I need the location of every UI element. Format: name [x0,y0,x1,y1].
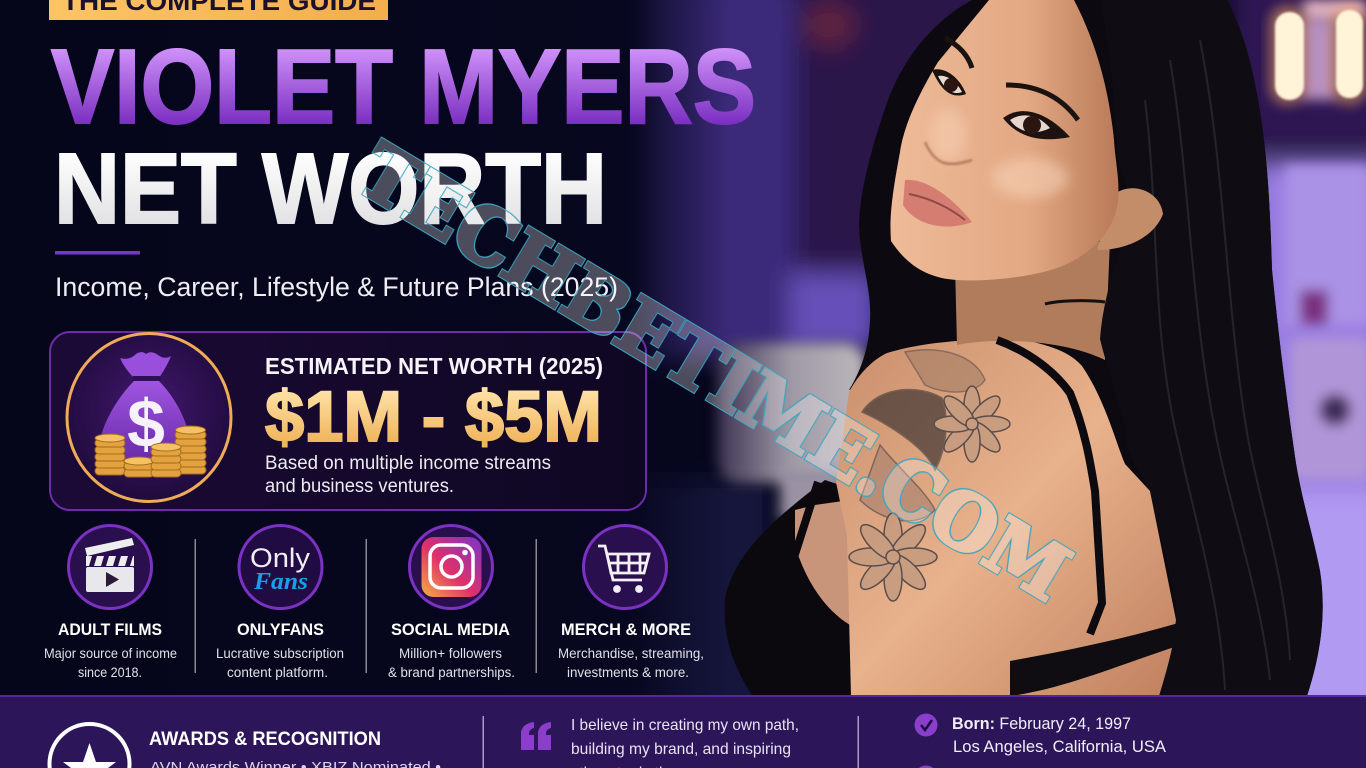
portrait illustration [725,0,1323,700]
ear [1097,188,1163,250]
quote text: I believe in creating my own path, [571,717,799,734]
straps [997,340,1102,634]
title: NET WORTH [54,133,607,245]
icon: coin stacks [95,426,206,477]
left dark fade [0,0,730,700]
income source: merch: investments & more. [567,665,689,680]
back hair [849,0,1323,696]
icon: shopping cart [598,546,649,592]
birth details: Los Angeles, California, USA [953,737,1167,756]
icon: onlyfans wordmark [250,543,311,595]
income source: onlyfans [216,526,344,680]
birth details: Born: February 24, 1997 [952,714,1131,733]
chest [795,500,850,625]
net worth note [265,453,551,497]
income source: merch: Merchandise, streaming, [558,646,704,661]
income source: merch: MERCH & MORE [561,620,691,639]
income source: social media: & brand partnerships. [388,665,515,680]
icon: onlyfans wordmark: Only [250,543,311,573]
hair highlights [1145,40,1290,690]
shoulder and back [836,339,1176,696]
shoulder tattoo [849,350,1010,601]
nose [925,142,972,164]
awards star badge [50,724,130,768]
income source: merch [558,526,704,680]
lips [903,180,972,227]
icon: money bag [67,334,231,502]
ceiling lights [1269,5,1366,105]
net worth value: $1M - $5M [265,378,602,457]
right front hair [1100,0,1323,696]
quote mark [521,722,551,750]
title [51,28,756,245]
income source: social media [388,526,515,680]
neck [955,240,1110,360]
awards text: AWARDS & RECOGNITION [149,729,381,750]
quote text: building my brand, and inspiring [571,741,791,758]
income source: onlyfans: Lucrative subscription [216,646,344,661]
garment [725,480,855,700]
income source: adult films: Major source of income [44,646,177,661]
icon: clapperboard [85,538,134,592]
income source: adult films: ADULT FILMS [58,620,162,639]
badge: the complete guide [49,0,388,20]
face [890,0,1118,280]
income source: adult films: since 2018. [78,665,142,680]
collar strap [1045,301,1105,304]
awards text [149,729,441,768]
net worth note: and business ventures. [265,476,454,497]
income source: onlyfans: content platform. [227,665,328,680]
subtitle: Income, Career, Lifestyle & Future Plans (2025) [55,272,618,302]
eyes and brows [932,38,1078,139]
income source: social media: SOCIAL MEDIA [391,620,510,639]
title: VIOLET MYERS [51,28,756,146]
quote text [571,717,799,768]
income source: adult films [44,526,177,680]
icon: instagram [422,537,482,597]
income source: social media: Million+ followers [399,646,502,661]
icon: onlyfans wordmark: Fans [253,569,308,595]
icon: money bag: $ [127,386,165,462]
income source: onlyfans: ONLYFANS [237,620,324,639]
bottom band [0,695,1366,768]
cheek highlight [992,158,1068,198]
panel: estimated net worth [50,332,646,510]
birth details [914,714,1167,768]
watermark: TECHBETIME.COM [344,126,1084,618]
net worth label: ESTIMATED NET WORTH (2025) [265,353,603,379]
net worth note: Based on multiple income streams [265,453,551,474]
